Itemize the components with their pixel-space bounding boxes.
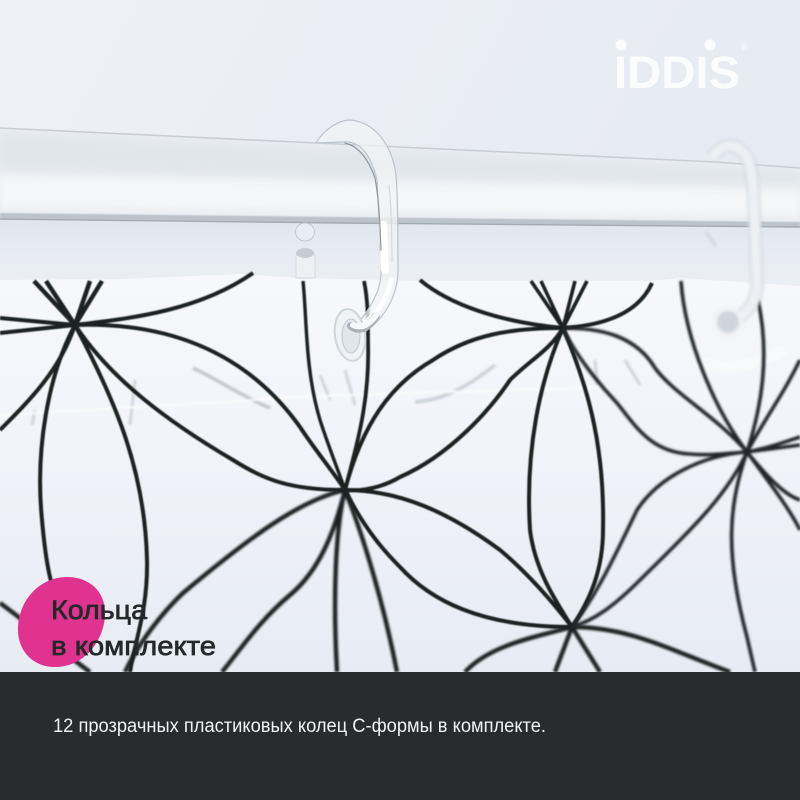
heading [51,595,216,661]
bottom panel [0,672,800,800]
curtain rod [0,128,800,227]
ring highlights [345,143,392,322]
rod bottom shadow [0,213,800,227]
star left [0,273,345,672]
star centre [303,281,572,627]
pink blob badge [18,577,105,667]
icon: ring eyelet, front [332,307,377,363]
rod shading bands [0,134,800,216]
heading: в комплекте [51,631,216,661]
blurred star at right [563,281,800,672]
icon: transparent C-ring, back [706,146,757,335]
curtain top band [0,218,800,285]
heading: Кольца [51,595,148,625]
star top right [420,280,652,627]
lines in lower foreground [0,490,730,672]
icon: transparent C-ring, front [316,120,398,331]
caption text: 12 прозрачных пластиковых колец С-формы в комплекте. [53,716,546,737]
curtain fabric [0,273,800,672]
geometric line pattern [0,273,652,672]
small ring hook drops [296,223,315,278]
fabric seam and show-through marks [0,350,785,425]
rod outlines [0,128,800,227]
logo: iddis: ® [741,42,748,52]
logo: iddis: IDDIS [614,47,740,98]
background wall [0,0,800,280]
